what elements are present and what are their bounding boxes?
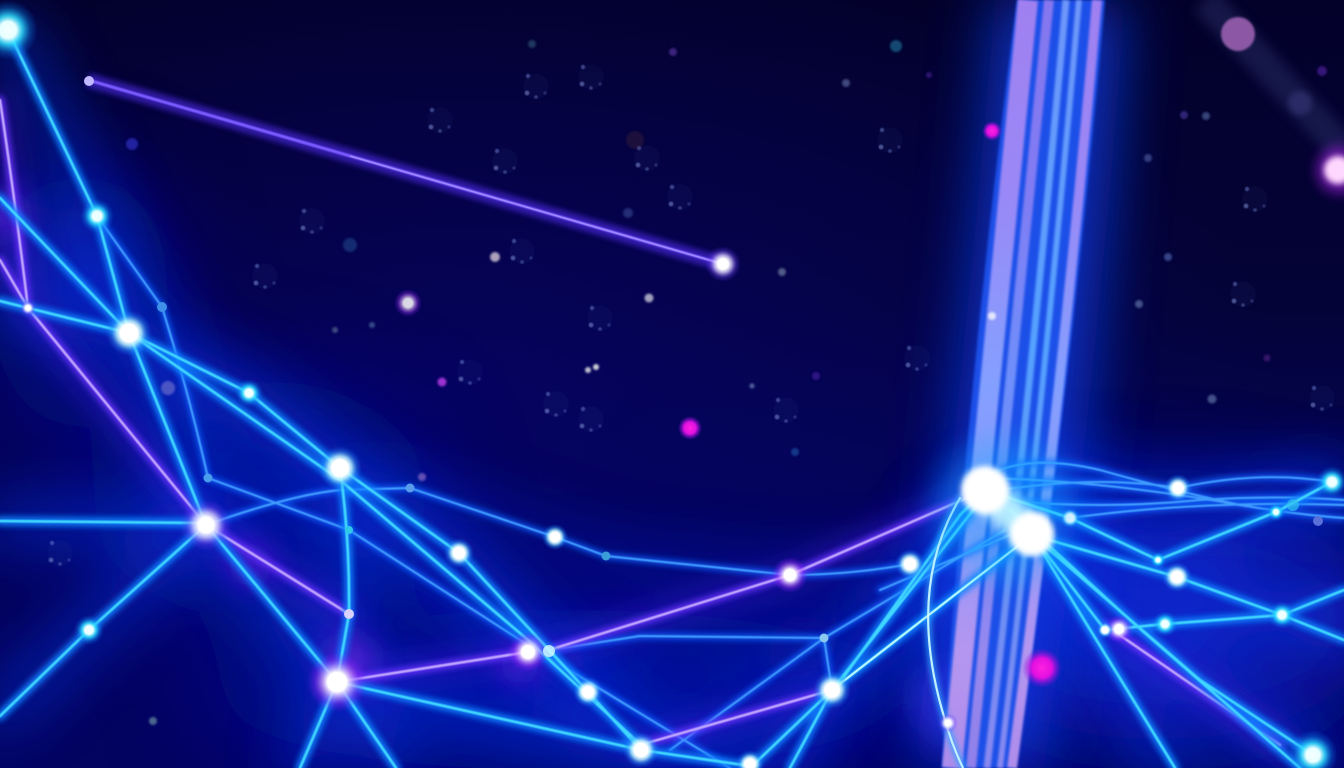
purple haze around nodes: [0, 191, 990, 740]
magenta dots: [394, 121, 1062, 688]
dust bubbles: [47, 64, 1335, 566]
bright magenta orb at right edge: [1316, 146, 1344, 194]
white curved strand by the beam: [832, 498, 1032, 768]
pale violet orb with diagonal streak: [1205, 0, 1344, 150]
blazing hub nodes: [935, 440, 1075, 580]
small floating specks: [126, 40, 1327, 725]
blue secondary links: [97, 216, 1344, 768]
violet links: [0, 100, 1280, 745]
vertical light beam: [942, 0, 1105, 768]
purple single link line: [84, 76, 741, 282]
wide blue haze along the lower network: [0, 170, 1344, 768]
